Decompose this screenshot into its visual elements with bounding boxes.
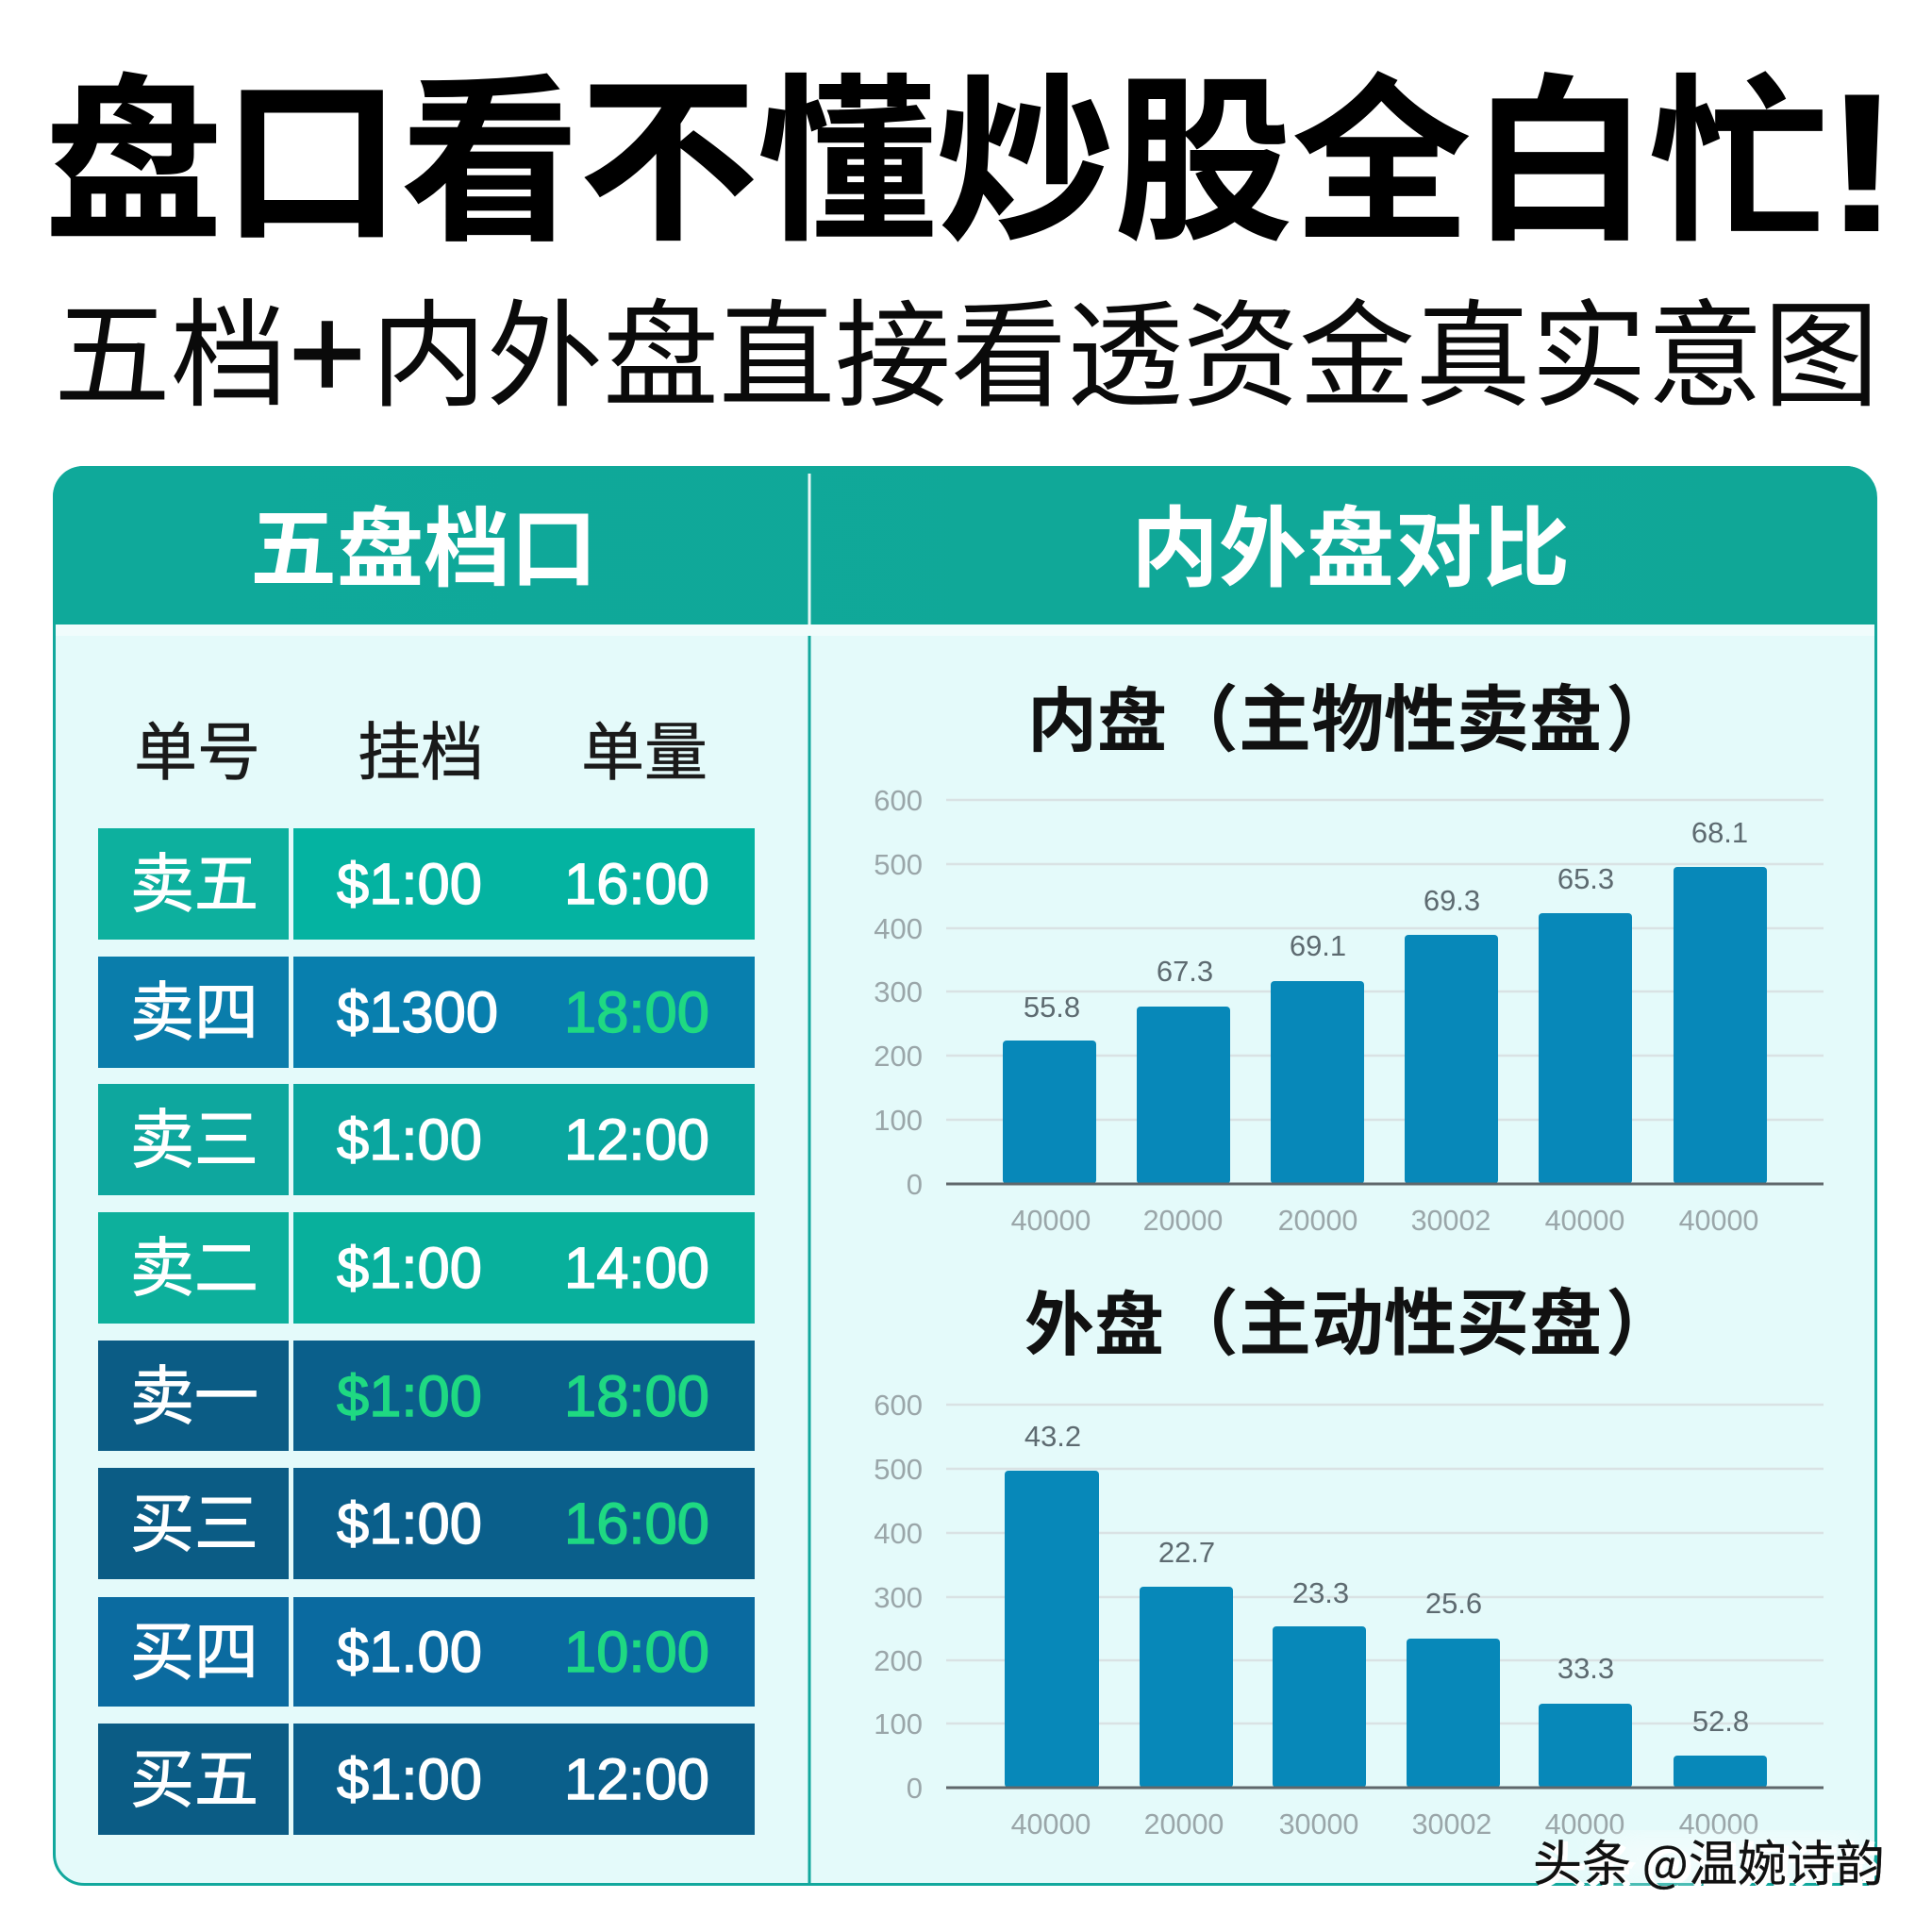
row: 卖三 xyxy=(98,1084,755,1195)
bar chart: inner: 55.8 xyxy=(1024,991,1080,1024)
row: 卖二: 卖二 xyxy=(130,1216,258,1309)
subtitle: 内外盘直接看透资金真实意图 xyxy=(371,262,1879,430)
panel border corner xyxy=(1698,1792,1875,1885)
bar chart: outer: 100 xyxy=(874,1707,923,1740)
bar chart: outer: 400 xyxy=(874,1517,923,1550)
bar chart: inner: 40000 xyxy=(1545,1205,1624,1237)
table column headers: 单量 xyxy=(581,718,708,789)
row: 买四: 买四 xyxy=(130,1600,258,1693)
bar chart: outer: 22.7 xyxy=(1158,1536,1215,1569)
row: 买五: 买五 xyxy=(130,1727,258,1821)
watermark: 头条 @温婉诗韵 xyxy=(1537,1827,1889,1898)
bar chart: outer: 30000 xyxy=(1279,1808,1358,1840)
row: 卖五: $1:00 xyxy=(337,852,482,917)
chart heading: outer xyxy=(1024,1284,1677,1365)
bar chart: outer: 0 xyxy=(907,1772,923,1805)
row: 买三 xyxy=(98,1468,755,1579)
row: 卖二 xyxy=(98,1212,755,1324)
row: 卖四 xyxy=(98,957,755,1068)
row: 卖四: 18:00 xyxy=(564,980,709,1045)
bar chart: outer: 20000 xyxy=(1144,1808,1224,1840)
bar chart: outer: 500 xyxy=(874,1453,923,1486)
row: 卖五 xyxy=(98,828,755,940)
bar chart: inner: 68.1 xyxy=(1691,816,1748,849)
chart heading: inner xyxy=(1027,680,1677,761)
bar chart: inner: 69.3 xyxy=(1424,884,1480,917)
table column headers: 单号 xyxy=(134,718,260,789)
bar chart: outer xyxy=(874,1389,1824,1840)
row: 买三: 16:00 xyxy=(564,1491,709,1557)
row: 卖二: 14:00 xyxy=(564,1236,709,1301)
bar chart: outer: 600 xyxy=(874,1389,923,1422)
title: 盘口看不懂炒股全白忙 xyxy=(44,19,1827,276)
row: 买五 xyxy=(98,1724,755,1835)
row: 卖三: 卖三 xyxy=(130,1088,258,1181)
title: ! xyxy=(1823,53,1902,274)
heading: order book: 五盘档口 xyxy=(250,479,597,605)
table column headers xyxy=(134,718,708,789)
row: 卖一: $1:00 xyxy=(337,1364,482,1429)
watermark: 头条 @温婉诗韵 xyxy=(1533,1824,1885,1895)
bar chart: outer: 40000 xyxy=(1679,1808,1758,1840)
bar chart: inner xyxy=(874,784,1824,1237)
bar chart: inner: 30002 xyxy=(1411,1205,1491,1237)
bar chart: inner: 67.3 xyxy=(1157,955,1213,988)
bar chart: outer: 25.6 xyxy=(1425,1587,1482,1620)
chart heading: inner: （主物性卖盘 xyxy=(1166,680,1602,761)
heading: inner vs outer: 内外盘对比 xyxy=(1131,477,1570,605)
subtitle: + xyxy=(289,278,366,426)
bar chart: outer: 200 xyxy=(874,1644,923,1677)
bar chart: inner: 500 xyxy=(874,848,923,881)
panel: order book rows xyxy=(98,828,755,1835)
bar chart: inner: 65.3 xyxy=(1557,862,1614,895)
row: 买三: $1:00 xyxy=(337,1491,482,1557)
panel: main table frame xyxy=(53,466,1876,1885)
bar chart: outer: 300 xyxy=(874,1581,923,1614)
bar chart: outer: 30002 xyxy=(1412,1808,1491,1840)
row: 卖五: 16:00 xyxy=(564,852,709,917)
row: 卖五: 卖五 xyxy=(130,832,258,925)
bar chart: outer: 23.3 xyxy=(1292,1576,1349,1609)
bar chart: inner: 400 xyxy=(874,912,923,945)
row: 卖一: 18:00 xyxy=(564,1364,709,1429)
row: 卖二: $1:00 xyxy=(337,1236,482,1301)
row: 买四: $1.00 xyxy=(337,1620,482,1685)
chart heading: outer: 外盘 xyxy=(1024,1286,1164,1364)
bar chart: inner: 0 xyxy=(907,1168,923,1201)
row: 买五: $1:00 xyxy=(337,1747,482,1812)
bar chart: inner: 69.1 xyxy=(1290,929,1346,962)
bar chart: inner: 600 xyxy=(874,784,923,817)
row: 买五: 12:00 xyxy=(564,1747,709,1812)
row: 卖三: 12:00 xyxy=(564,1108,709,1173)
chart heading: inner: ） xyxy=(1606,681,1677,761)
bar chart: inner: 20000 xyxy=(1143,1205,1223,1237)
bar chart: inner: 100 xyxy=(874,1104,923,1137)
chart heading: outer: （主动性买盘 xyxy=(1166,1284,1602,1365)
row: 买四 xyxy=(98,1597,755,1707)
subtitle: 五档 xyxy=(54,260,288,430)
row: 卖一: 卖一 xyxy=(130,1344,258,1438)
chart heading: inner: 内盘 xyxy=(1027,682,1167,760)
bar chart: inner: 300 xyxy=(874,975,923,1008)
row: 卖四: $1300 xyxy=(337,980,498,1045)
row: 卖一 xyxy=(98,1341,755,1451)
table column headers: 挂档 xyxy=(358,718,484,789)
row: 买四: 10:00 xyxy=(564,1620,709,1685)
bar chart: outer: 40000 xyxy=(1545,1808,1624,1840)
bar chart: inner: 40000 xyxy=(1679,1205,1758,1237)
row: 卖三: $1:00 xyxy=(337,1108,482,1173)
bar chart: outer: 40000 xyxy=(1011,1808,1091,1840)
bar chart: inner: 200 xyxy=(874,1040,923,1073)
bar chart: inner: 20000 xyxy=(1278,1205,1357,1237)
row: 卖四: 卖四 xyxy=(130,960,258,1054)
bar chart: outer: 52.8 xyxy=(1692,1705,1749,1738)
bar chart: outer: 43.2 xyxy=(1024,1420,1081,1453)
watermark haze xyxy=(1604,1835,1868,1882)
row: 买三: 买三 xyxy=(130,1472,258,1565)
bar chart: inner: 40000 xyxy=(1011,1205,1091,1237)
bar chart: outer: 33.3 xyxy=(1557,1652,1614,1685)
chart heading: outer: ） xyxy=(1606,1285,1677,1365)
